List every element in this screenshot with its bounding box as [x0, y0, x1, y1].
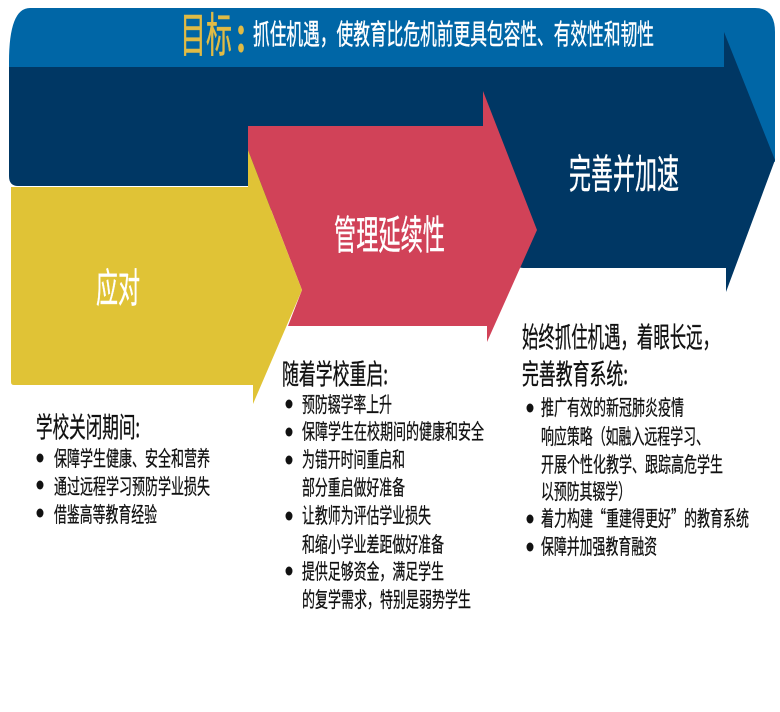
- heading: reopening: 随着学校重启:: [282, 353, 388, 393]
- goal banner background: [9, 8, 775, 162]
- label: cope: 应对: [96, 256, 140, 314]
- bullet list: improve: [526, 392, 749, 561]
- bullet list: reopening: 保障学生在校期间的健康和安全: [302, 416, 484, 446]
- bullet list: improve: 以预防其辍学）: [541, 476, 631, 506]
- navy arrow: improve and accelerate: [9, 32, 775, 292]
- label: improve and accelerate: 完善并加速: [569, 142, 679, 200]
- text block: as schools reopen: [282, 353, 484, 614]
- label: manage continuity: 管理延续性: [334, 203, 445, 261]
- bullet list: during closure: 保障学生健康、安全和营养: [54, 443, 210, 473]
- bullet list: reopening: 和缩小学业差距做好准备: [302, 529, 444, 559]
- heading: during closure: 学校关闭期间:: [36, 406, 140, 446]
- bullet list: reopening: 让教师为评估学业损失: [302, 500, 431, 530]
- bullet list: during closure: 通过远程学习预防学业损失: [54, 471, 210, 501]
- bullet list: reopening: [286, 389, 484, 614]
- bullet list: improve: 保障并加强教育融资: [541, 531, 657, 561]
- bullet list: reopening: 提供足够资金，满足学生: [302, 556, 444, 586]
- yellow arrow: cope: [11, 150, 302, 404]
- red arrow: manage continuity: [248, 91, 537, 342]
- bullet list: reopening: 预防辍学率上升: [302, 389, 392, 419]
- bullet list: reopening: 部分重启做好准备: [302, 472, 405, 502]
- bullet list: reopening: 的复学需求，特别是弱势学生: [302, 584, 471, 614]
- bullet list: reopening: 为错开时间重启和: [302, 444, 405, 474]
- bullet list: improve: 推广有效的新冠肺炎疫情: [541, 392, 684, 422]
- goal title: [180, 0, 654, 66]
- text block: seize the opportunity: [522, 316, 749, 561]
- text block: during school closure: [36, 406, 210, 529]
- heading: improve education systems: 完善教育系统:: [522, 353, 628, 393]
- bullet list: during closure: [36, 443, 210, 529]
- heading: improve education systems: [522, 316, 719, 393]
- bullet list: during closure: 借鉴高等教育经验: [54, 499, 157, 529]
